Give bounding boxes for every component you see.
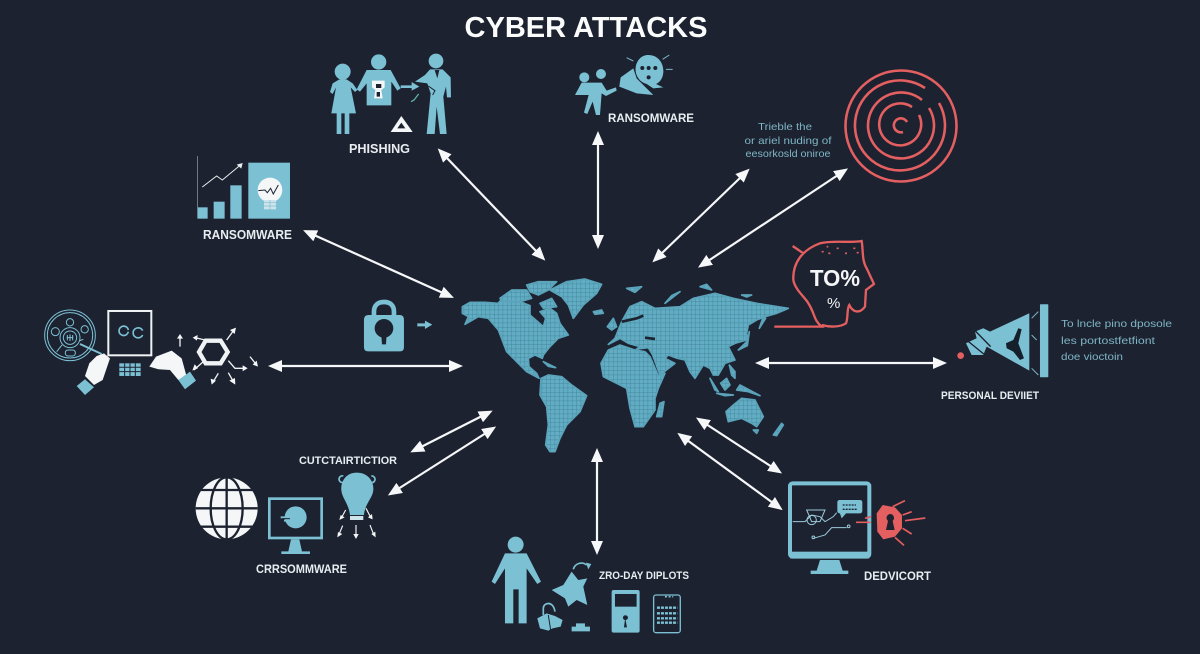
arctic islands (500, 282, 557, 308)
africa (601, 345, 665, 427)
north america (462, 301, 568, 378)
icon: security circuit and hands (45, 310, 258, 395)
icon: monitor with red lock (790, 483, 925, 574)
map: americas and greenland (462, 279, 603, 452)
label: cut attraction: CUTCTAIRTICTIOR (299, 455, 397, 467)
caption: right (1061, 318, 1172, 363)
caribbean (543, 362, 556, 368)
caption: top right: or ariel nuding of (744, 135, 832, 147)
world map (462, 279, 788, 452)
icon: phishing people (330, 54, 451, 134)
icon: dial (45, 310, 95, 361)
text: head percentage (810, 265, 860, 312)
caption: top right: Trieble the (758, 121, 812, 133)
greenland (550, 279, 602, 318)
label: personal device: PERSONAL DEVIIET (941, 390, 1039, 402)
icon: person and devices (492, 537, 680, 633)
icon: globe (196, 477, 258, 539)
caption: top right: eesorkosld oniroe (746, 148, 831, 160)
icon: megaphone (957, 304, 1048, 377)
caption: top right (744, 121, 832, 160)
south america (540, 375, 587, 452)
label: crsommware: CRRSOMMWARE (256, 562, 347, 576)
label: zero day exploits: ZRO-DAY DIPLOTS (599, 570, 689, 582)
label: ransomware top: RANSOMWARE (608, 111, 694, 125)
icon: padlock (364, 302, 432, 351)
baltic and black sea (622, 316, 655, 339)
text: head percentage: TO% (810, 265, 860, 291)
map: eurasia africa oceania (601, 284, 788, 436)
eurasia (608, 293, 788, 378)
icon: light bulb (337, 473, 376, 539)
caption: right: doe vioctoin (1061, 351, 1123, 363)
title: CYBER ATTACKS (464, 12, 708, 44)
icon: red head with percentage (774, 241, 874, 327)
islands (607, 284, 783, 436)
caption: right: les portostfetfiont (1061, 335, 1155, 347)
arrows (280, 143, 935, 543)
australia (726, 398, 763, 427)
icon: ransomware top (575, 55, 673, 115)
label: device port: DEDVICORT (864, 569, 932, 583)
label: phishing: PHISHING (349, 141, 410, 156)
label: ransomware left: RANSOMWARE (203, 227, 292, 242)
icon: monitor (269, 499, 322, 554)
text: head percentage: % (827, 295, 840, 312)
caption: right: To lncle pino dposole (1061, 318, 1172, 330)
iceland (593, 310, 603, 314)
icon: bar chart with bulb (198, 156, 290, 219)
icon: radar target (846, 70, 956, 182)
